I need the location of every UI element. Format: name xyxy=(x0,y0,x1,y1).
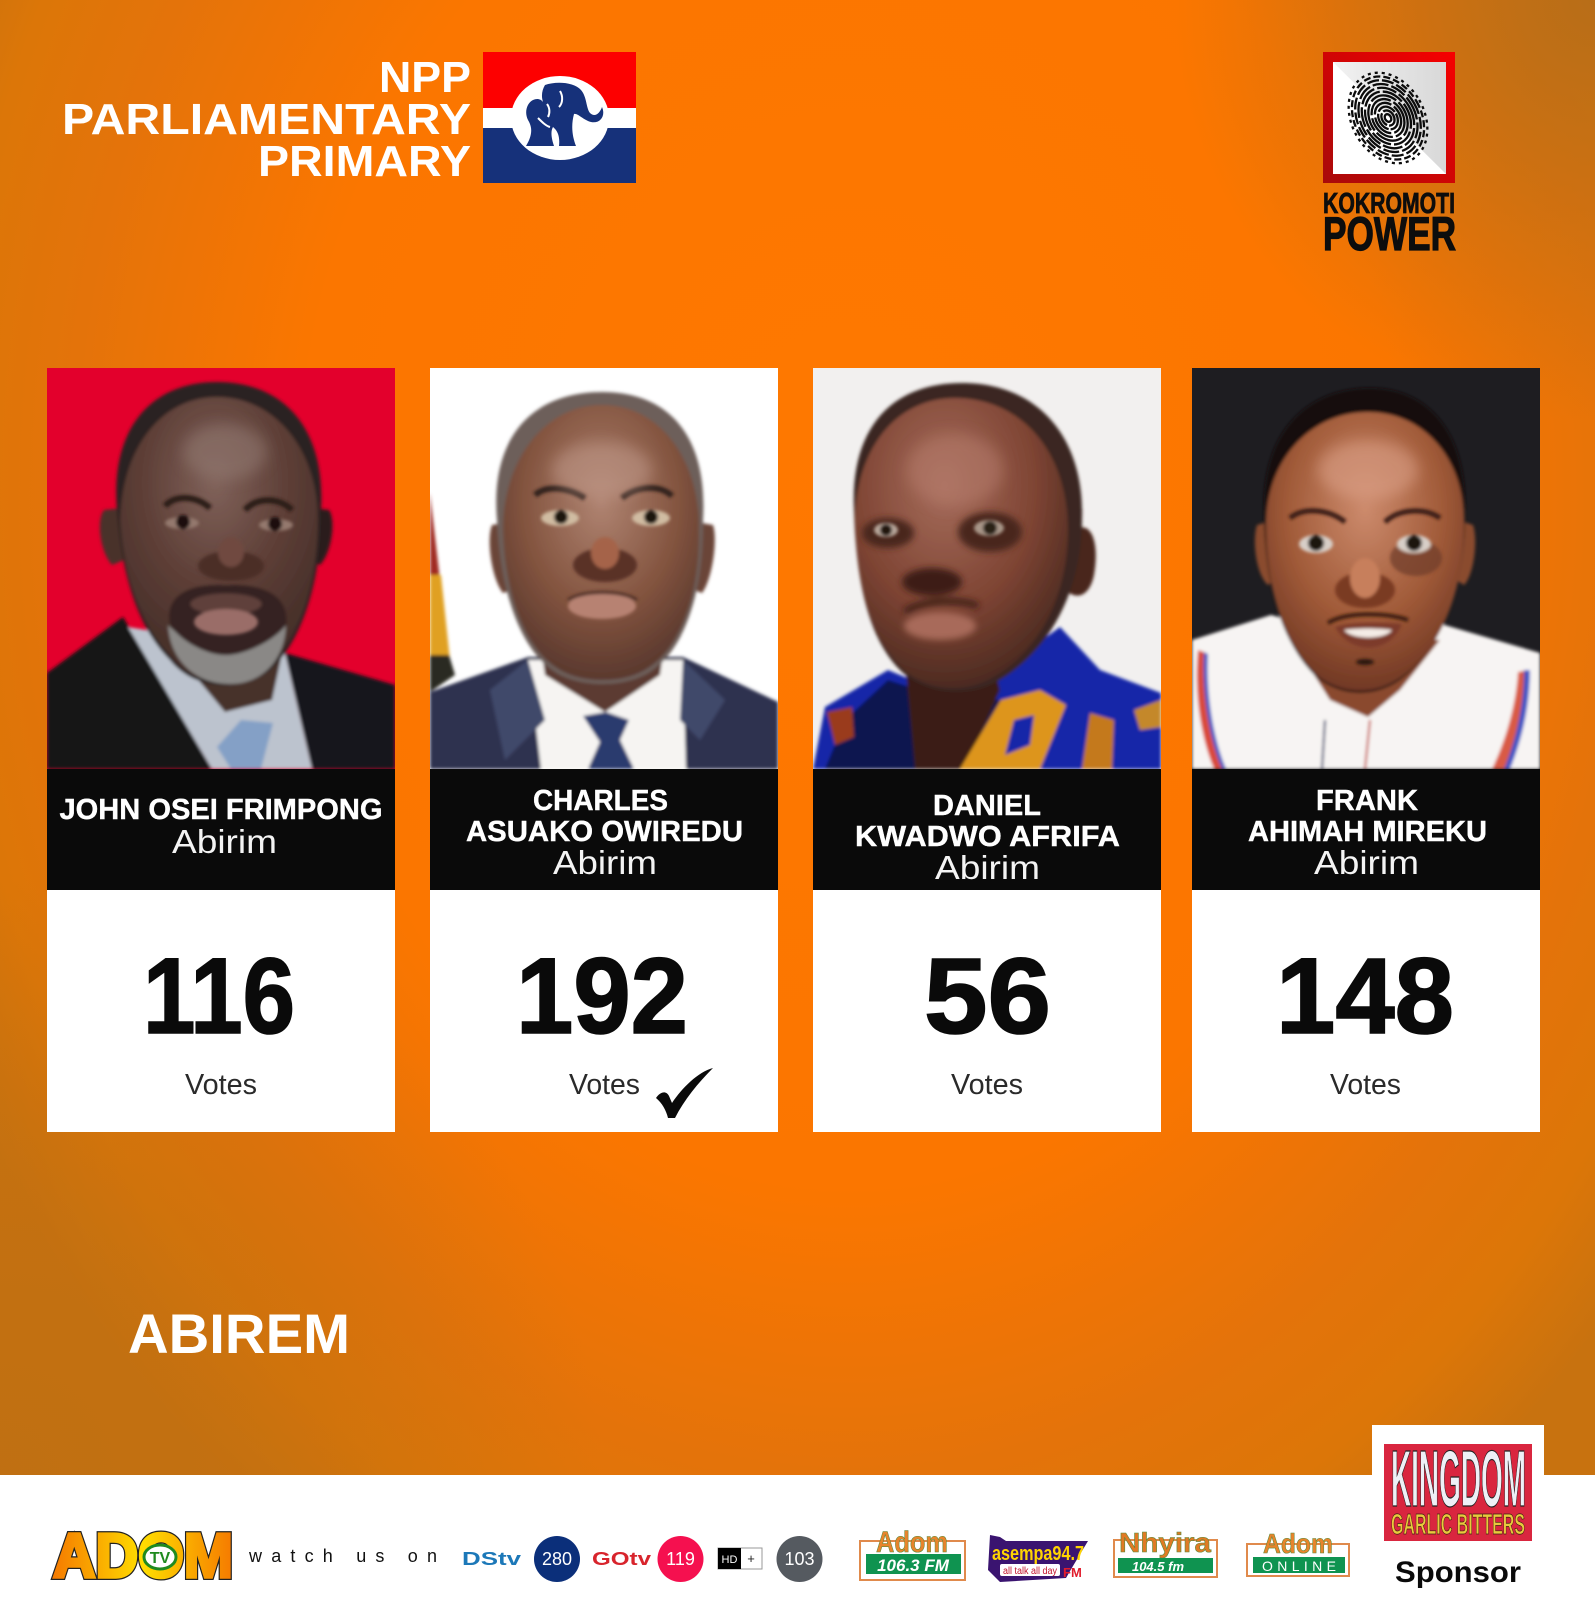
vote panel xyxy=(47,890,395,1132)
candidate name: ASUAKO OWIREDU xyxy=(466,816,743,848)
title: NPP Parliamentary Primary: NPP xyxy=(379,53,471,102)
logo: Adom Online xyxy=(1247,1528,1349,1576)
panel: candidate John Osei Frimpong xyxy=(47,368,395,1132)
candidate name xyxy=(466,785,743,848)
logo: Nhyira 104.5 fm: 104.5 fm xyxy=(1132,1559,1184,1574)
portrait: John Osei Frimpong xyxy=(47,368,395,769)
logo: Kokromoti Power: KOKROMOTI xyxy=(1323,188,1455,220)
logo: HD+ channel 103: HD xyxy=(722,1554,737,1566)
portrait: Charles Asuako Owiredu xyxy=(430,368,778,769)
logo: Adom TV: ADOM xyxy=(53,1522,233,1591)
vote count: 148 xyxy=(1276,935,1454,1056)
footer bar xyxy=(0,1475,1595,1600)
votes label: Votes xyxy=(951,1069,1023,1101)
votes label: Votes xyxy=(569,1069,640,1101)
logo: Asempa 94.7 FM: FM xyxy=(1063,1565,1082,1580)
candidate name: CHARLES xyxy=(533,785,668,817)
name bar xyxy=(813,769,1161,890)
logo: DStv channel 280 xyxy=(462,1536,580,1582)
name bar xyxy=(47,769,395,890)
votes label: Votes xyxy=(185,1069,257,1101)
logo: Adom 106.3 FM xyxy=(860,1526,965,1580)
sponsor label artwork xyxy=(1384,1434,1532,1541)
candidate name xyxy=(855,790,1120,853)
icon: NPP elephant flag xyxy=(483,52,636,183)
candidate name xyxy=(1248,785,1487,848)
logo: Nhyira 104.5 fm: Nhyira xyxy=(1119,1527,1211,1558)
logo: Nhyira 104.5 fm xyxy=(1114,1527,1217,1577)
panel: candidate Daniel Kwadwo Afrifa xyxy=(813,368,1161,1132)
title: NPP Parliamentary Primary xyxy=(62,53,471,186)
constituency: Abirim xyxy=(1314,844,1419,881)
logo: Asempa 94.7 FM: asempa94.7 xyxy=(992,1543,1084,1565)
name bar xyxy=(430,769,778,890)
constituency: Abirim xyxy=(553,844,657,881)
vote panel xyxy=(430,890,778,1132)
sponsor panel: Kingdom Garlic Bitters xyxy=(1372,1425,1544,1600)
candidate name: JOHN OSEI FRIMPONG xyxy=(60,794,382,826)
vote count: 116 xyxy=(143,935,295,1056)
logo: Adom 106.3 FM: 106.3 FM xyxy=(877,1556,950,1575)
logo: Adom 106.3 FM: Adom xyxy=(876,1526,948,1559)
logo: Adom Online: ONLINE xyxy=(1262,1558,1336,1574)
candidate name: DANIEL xyxy=(933,790,1041,822)
name bar xyxy=(1192,769,1540,890)
logo: GOtv channel 119: GOtv xyxy=(592,1549,651,1569)
candidate name: FRANK xyxy=(1316,785,1418,817)
sponsor caption: Sponsor xyxy=(1395,1556,1521,1589)
portrait: Daniel Kwadwo Afrifa xyxy=(813,368,1161,769)
vote panel xyxy=(1192,890,1540,1132)
logo: Adom TV: TV xyxy=(150,1550,171,1567)
logo: GOtv channel 119: 119 xyxy=(666,1549,695,1569)
logo: Asempa 94.7 FM: all talk all day xyxy=(1003,1566,1057,1577)
logo: HD+ channel 103: + xyxy=(747,1551,755,1566)
title: NPP Parliamentary Primary: PARLIAMENTARY xyxy=(62,95,471,144)
icon: winner check mark xyxy=(656,1068,713,1118)
panel: candidate Frank Ahimah Mireku xyxy=(1192,368,1540,1132)
logo: GOtv channel 119 xyxy=(592,1536,704,1582)
logo: Kokromoti Power: POWER xyxy=(1323,207,1456,260)
panel: candidate Charles Asuako Owiredu xyxy=(430,368,778,1132)
heading: constituency Abirem: ABIREM xyxy=(128,1302,350,1365)
text: watch us on: watch us on xyxy=(248,1546,437,1566)
candidate name: AHIMAH MIREKU xyxy=(1248,816,1487,848)
icon: fingerprint in red frame xyxy=(1323,52,1455,183)
votes label: Votes xyxy=(1330,1069,1401,1101)
logo: Kokromoti Power xyxy=(1323,52,1456,260)
vote count: 56 xyxy=(924,935,1051,1056)
constituency: Abirim xyxy=(172,823,277,860)
title: NPP Parliamentary Primary: PRIMARY xyxy=(258,137,471,186)
portrait: Frank Ahimah Mireku xyxy=(1192,368,1540,769)
logo: Adom Online: Adom xyxy=(1263,1528,1333,1559)
vote count: 192 xyxy=(516,935,688,1056)
logo: DStv channel 280: 280 xyxy=(542,1549,572,1569)
logo: Asempa 94.7 FM xyxy=(988,1535,1088,1582)
logo: HD+ channel 103: 103 xyxy=(784,1549,815,1569)
logo: HD+ channel 103 xyxy=(718,1536,822,1582)
vote panel xyxy=(813,890,1161,1132)
logo: Adom TV: ADOM xyxy=(53,1522,233,1591)
constituency: Abirim xyxy=(935,849,1040,886)
logo: DStv channel 280: DStv xyxy=(462,1549,521,1569)
candidate name: KWADWO AFRIFA xyxy=(855,821,1120,853)
